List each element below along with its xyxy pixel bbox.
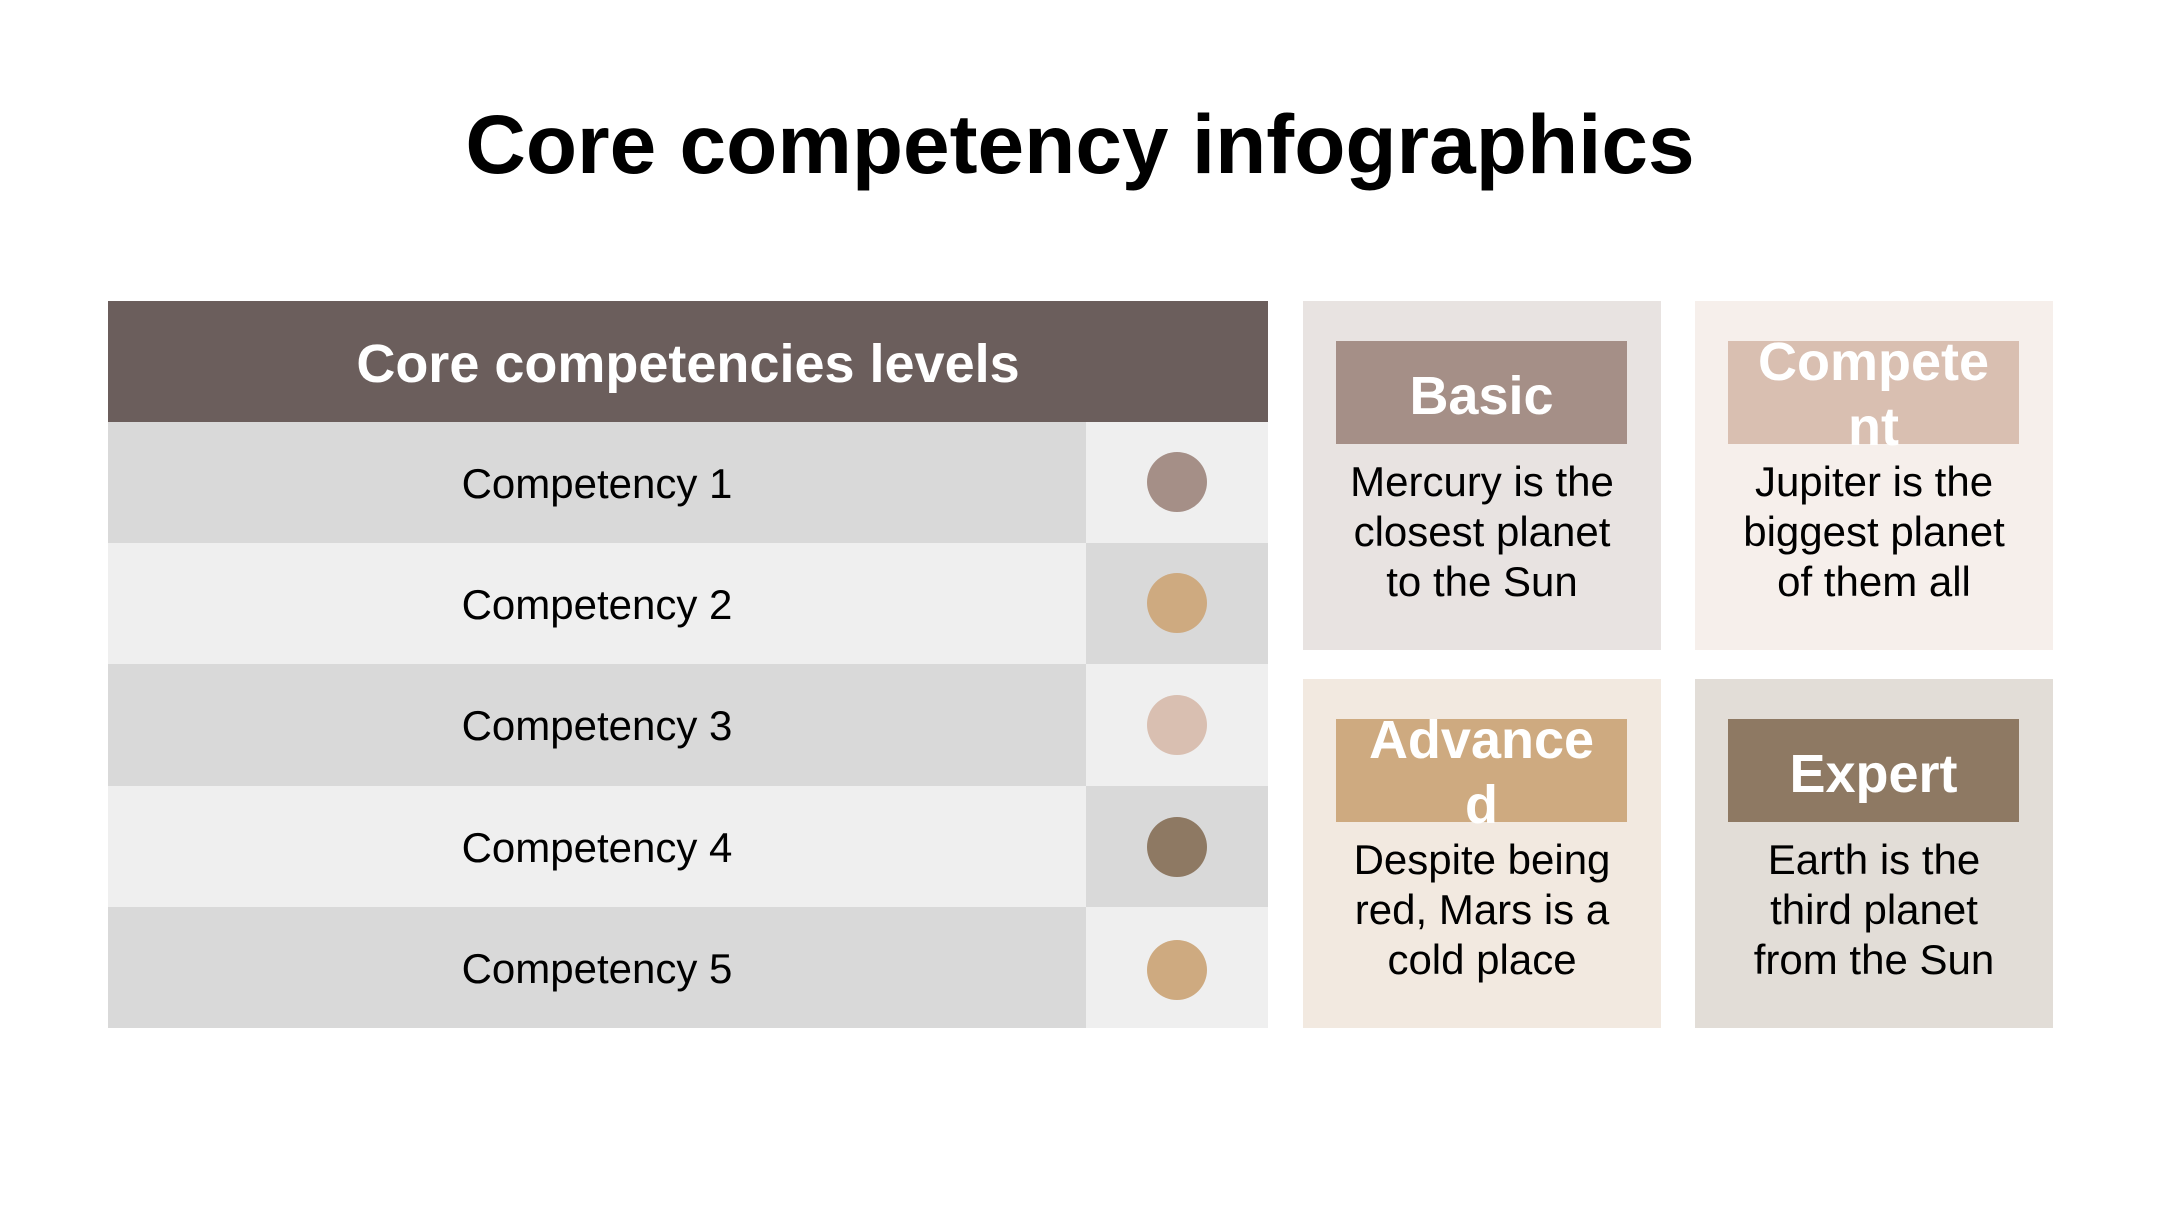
text: basic: closest planet (1354, 508, 1610, 555)
panel: advanced (1303, 679, 1661, 1028)
panel: competency levels table (108, 301, 1268, 1028)
row: competency 3: Competency 3 (462, 702, 732, 749)
row: competency 2: Competency 2 (462, 581, 732, 628)
level cell: competency 3 (1086, 664, 1268, 786)
label: competent (1728, 341, 2019, 444)
panel: competent (1695, 301, 2053, 650)
text: basic: to the Sun (1386, 558, 1578, 605)
row: competency 5 (108, 907, 1086, 1028)
level cell: competency 1 (1086, 422, 1268, 543)
panel: expert (1695, 679, 2053, 1028)
level cell: competency 5 (1086, 907, 1268, 1028)
text: competent (1743, 458, 2005, 605)
text: competent: biggest planet (1743, 508, 2005, 555)
row: competency 4: Competency 4 (462, 824, 732, 871)
row: competency 1 (108, 422, 1086, 543)
text: advanced: Despite being (1354, 836, 1610, 882)
text: competent: Jupiter is the (1755, 458, 1993, 504)
table header (108, 301, 1268, 422)
label: competent: Compete (1758, 332, 1989, 392)
text: basic: Mercury is the (1350, 458, 1614, 504)
text: expert (1754, 836, 1994, 983)
text: basic (1350, 458, 1614, 605)
label: expert (1728, 719, 2019, 822)
text: expert: third planet (1770, 886, 1978, 933)
level cell: competency 2 (1086, 543, 1268, 664)
row: competency 3 (108, 664, 1086, 786)
label: advanced (1336, 719, 1627, 822)
table header: Core competencies levels (356, 334, 1020, 394)
title: Core competency infographics (465, 97, 1695, 191)
text: advanced: cold place (1387, 936, 1577, 983)
label: competent: nt (1848, 397, 1899, 457)
text: competent: of them all (1777, 558, 1971, 605)
label: basic: Basic (1409, 366, 1554, 426)
text: expert: from the Sun (1754, 936, 1994, 983)
row: competency 4 (108, 786, 1086, 907)
row: competency 2 (108, 543, 1086, 664)
panel: basic (1303, 301, 1661, 650)
row: competency 5: Competency 5 (462, 945, 732, 992)
label: advanced: d (1465, 775, 1498, 835)
text: expert: Earth is the (1768, 836, 1980, 882)
level cell: competency 4 (1086, 786, 1268, 907)
label: advanced: Advance (1369, 710, 1594, 770)
text: advanced (1354, 836, 1610, 983)
text: advanced: red, Mars is a (1355, 886, 1609, 933)
row: competency 1: Competency 1 (462, 460, 732, 507)
label: basic (1336, 341, 1627, 444)
label: expert: Expert (1789, 744, 1958, 804)
